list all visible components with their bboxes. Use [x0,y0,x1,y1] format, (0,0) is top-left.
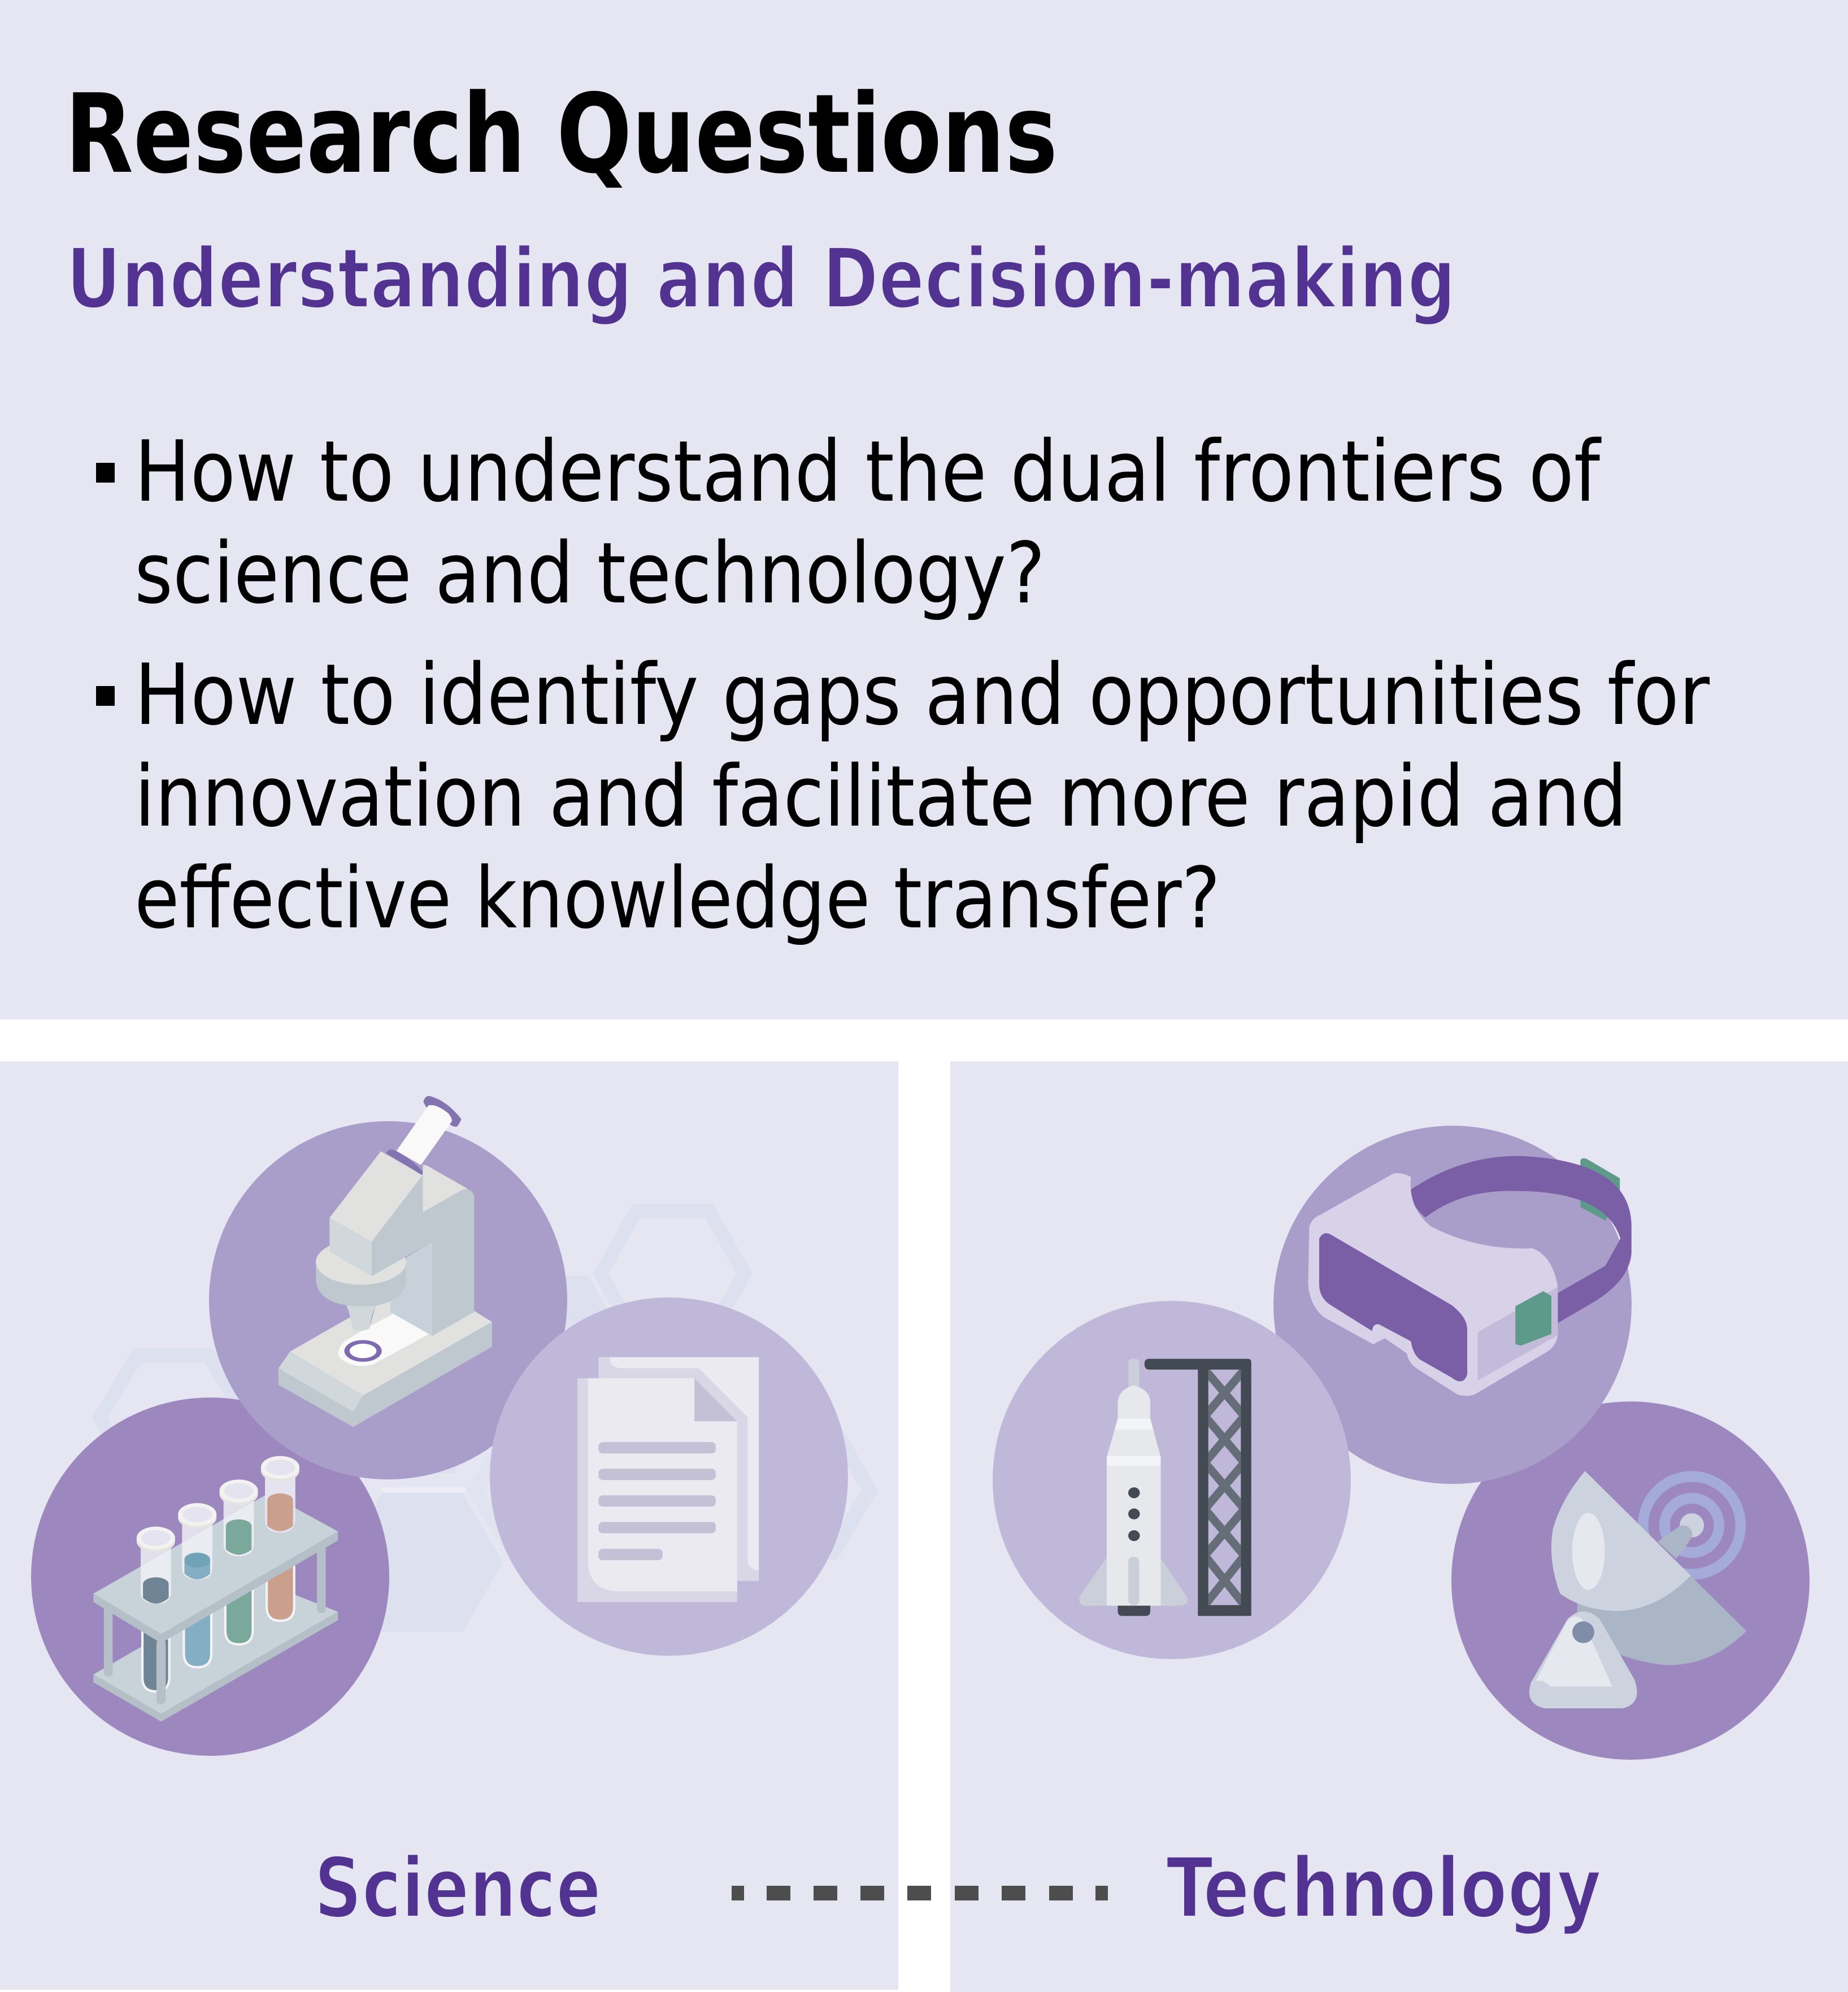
circle: document background [490,1297,848,1656]
circle: rocket background [993,1301,1351,1659]
label: Science: Science [314,1840,601,1937]
microscope body and eyepiece [316,1096,474,1336]
label: Technology: Technology [1166,1840,1602,1937]
panel: science [0,1061,898,1990]
icon: test tubes in rack [93,1456,338,1721]
icon: satellite dish [1529,1471,1746,1708]
circle: VR headset background [1273,1126,1632,1484]
tower lattice [1208,1370,1241,1605]
bullet 1 marker [96,463,115,483]
circle: test tubes background [31,1398,389,1756]
question list [96,423,1710,948]
circle: satellite dish background [1451,1401,1810,1760]
tube upper parts [141,1472,295,1604]
question 2 text: innovation and facilitate more rapid and [134,748,1627,846]
question 1 text: How to understand the dual frontiers of [134,423,1602,521]
question 2 text [134,646,1710,948]
icon: rocket and launch tower [1079,1359,1251,1616]
question 2 text: How to identify gaps and opportunities for [134,646,1710,744]
icon: VR headset [1308,1156,1632,1396]
bullet 2 marker [96,686,115,706]
icon: documents [577,1357,759,1602]
tube lower parts [142,1556,294,1691]
subtitle: Understanding and Decision-making [66,231,1456,327]
icon: microscope [279,1096,492,1427]
hexagon background pattern [92,1204,878,1632]
question 2 text: effective knowledge transfer? [134,850,1220,948]
panel: technology [950,1061,1848,1992]
microscope base [279,1311,492,1427]
question 1 text [134,423,1602,623]
dashed connector between science and technology [732,1886,1108,1900]
tube rims [137,1456,299,1552]
panel: research questions header [0,0,1848,1019]
circle: microscope background [209,1121,567,1479]
title: Research Questions [65,71,1058,198]
question 1 text: science and technology? [134,525,1045,623]
